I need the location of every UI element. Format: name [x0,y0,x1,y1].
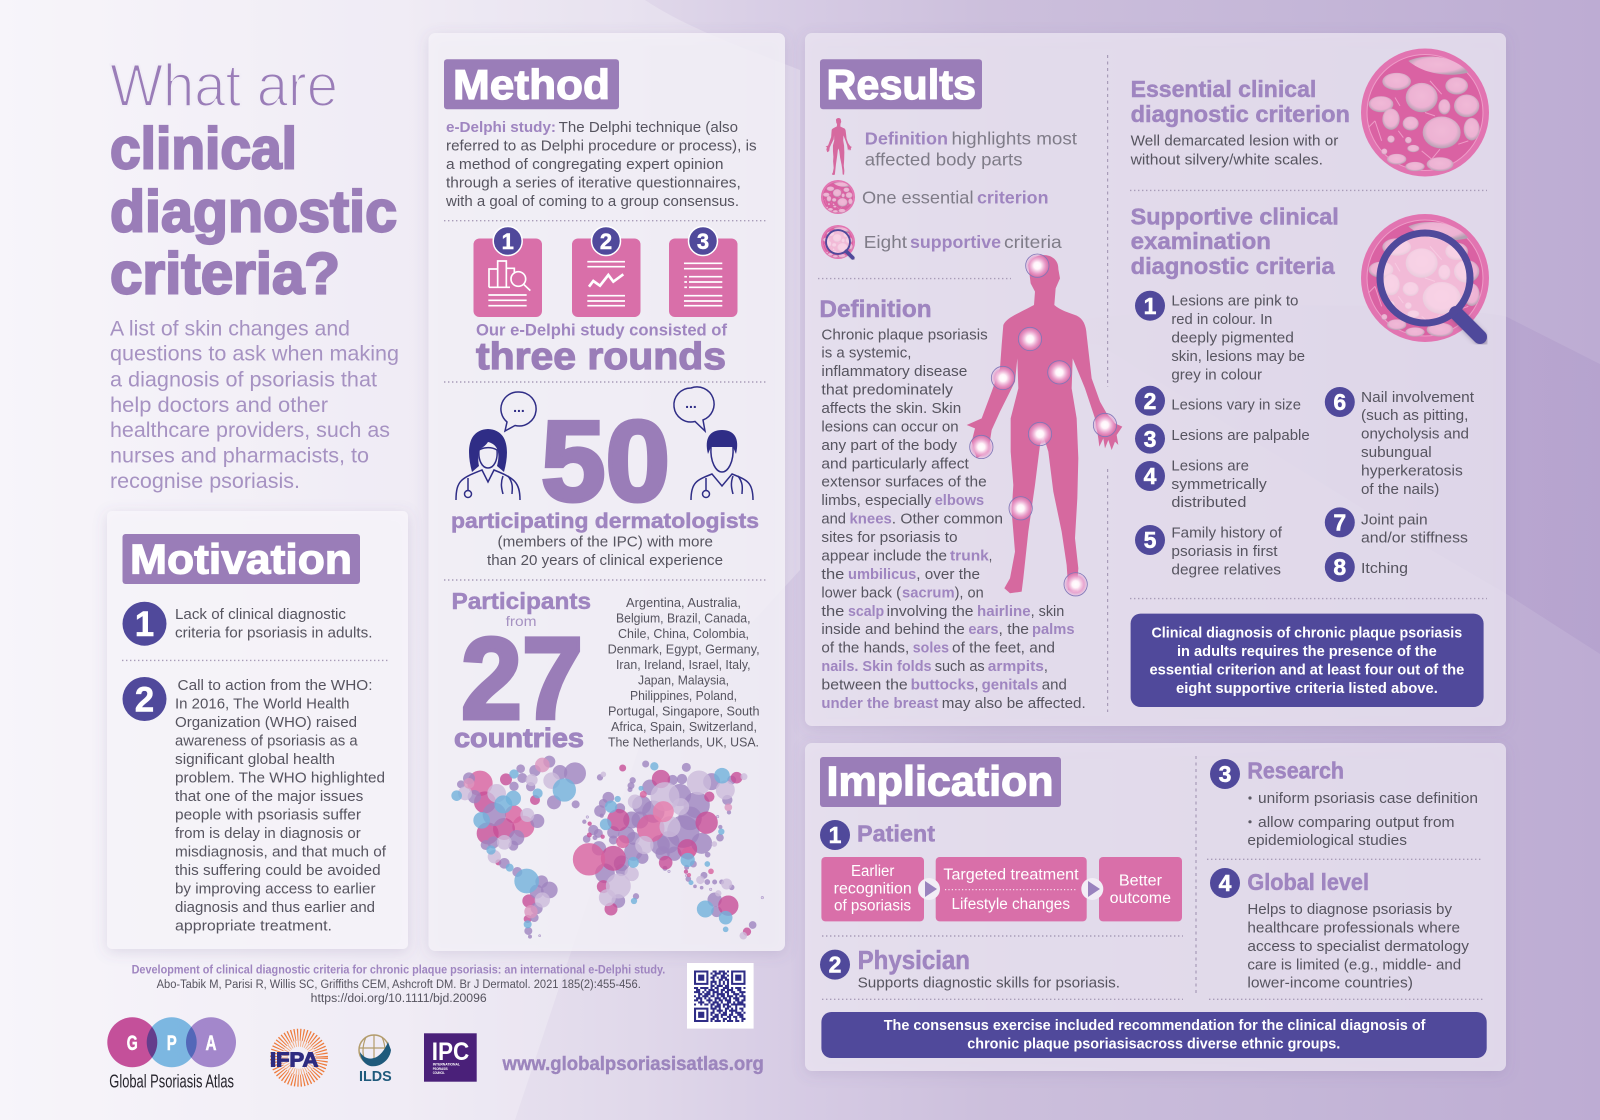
criterion 6: 6 [1333,389,1346,415]
research: allow comparing output from [1258,814,1455,831]
callout: consensus: chronic plaque psoriasisacross diverse ethnic groups. [967,1036,1340,1052]
global level: care is limited (e.g., middle- and [1247,956,1461,973]
summary: definition: Definition [865,129,948,149]
country list [608,596,760,749]
criterion 2 [1135,386,1301,416]
summary: supportive [821,225,1062,259]
citation: Development of clinical diagnostic criteria for chronic plaque psoriasis: an international e-Delphi study. [132,965,665,977]
box: earlier recognition: Earlier [851,863,894,880]
e-Delphi text: The Delphi technique (also [559,119,738,136]
box: better outcome: outcome [1110,890,1171,907]
supportive criteria heading: diagnostic criteria [1131,253,1336,279]
e-Delphi text: with a goal of coming to a group consensus. [445,193,739,210]
definition text: trunk [950,548,989,564]
box: earlier recognition [821,857,924,921]
panel: motivation [107,511,408,949]
definition text: involving the [887,603,974,620]
criterion 1: red in colour. In [1171,311,1272,328]
motivation item 2: 2 [135,680,154,720]
country list: Philippines, Poland, [630,689,737,703]
subtitle text: A list of skin changes and [110,318,350,341]
definition text: such as [935,658,985,675]
country list: Iran, Ireland, Israel, Italy, [616,658,750,672]
definition text: the [821,603,844,620]
icon: female doctor [456,392,536,500]
definition text: and particularly affect [821,455,970,472]
physician: Physician [858,947,970,975]
global level: healthcare professionals where [1247,920,1460,936]
criterion 6: onycholysis and [1361,426,1469,443]
definition text: . Other common [892,511,1003,528]
motivation item 2: misdiagnosis, and that much of [175,844,387,860]
essential criterion: without silvery/white scales. [1130,151,1323,168]
logo: ILDS: ILDS [359,1068,392,1085]
participating dermatologists text: participating dermatologists [451,510,759,533]
logo: Global Psoriasis Atlas: A [206,1032,216,1055]
definition text: armpits [988,658,1044,675]
definition text: extensor surfaces of the [821,474,987,491]
definition text: buttocks [911,676,974,694]
motivation item 2: by improving access to earlier [175,880,376,898]
motivation item 2: people with psoriasis suffer [175,806,361,824]
summary: definition [826,118,1077,175]
criterion 6: of the nails) [1361,481,1439,498]
callout: diagnosis requirement: eight supportive criteria listed above. [1176,680,1438,697]
essential criterion: diagnostic criterion [1131,101,1350,127]
criterion 2: 2 [1144,388,1156,414]
criterion 5 [1135,524,1283,578]
global level [1210,868,1469,992]
round card 3: 3 [697,229,709,254]
summary: essential: One essential [862,188,974,208]
definition text: the [821,566,844,583]
participants count: from [506,613,537,629]
box: treatment: Lifestyle changes [952,896,1070,913]
logo: IFPA: IFPA [270,1050,318,1072]
motivation item 2: problem. The WHO highlighted [175,770,385,786]
country list: Argentina, Australia, [626,596,741,610]
panel: implication [805,743,1506,1071]
box: treatment [936,857,1087,921]
definition text: genitals [982,676,1038,694]
three rounds text: Our e-Delphi study consisted of [476,322,727,340]
number 50: 50 [541,398,670,526]
country list: Belgium, Brazil, Canada, [616,612,750,626]
criterion 7: and/or stiffness [1361,530,1468,547]
criterion 6 [1325,387,1475,498]
criterion 1: Lesions are pink to [1171,292,1298,309]
criterion 8 [1325,552,1408,582]
criterion 4 [1135,457,1267,511]
motivation item 2 [122,677,387,934]
criterion 5: psoriasis in first [1171,543,1278,560]
criterion 1: skin, lesions may be [1171,348,1305,365]
summary: definition: affected body parts [865,149,1023,169]
round card 3 [669,226,738,317]
research: uniform psoriasis case definition [1258,790,1478,807]
definition text: Definition [819,296,932,323]
research: Research [1247,758,1344,784]
definition text: hairline [977,603,1031,620]
motivation item 2: awareness of psoriasis as a [175,732,358,750]
motivation item 1: 1 [135,605,154,644]
motivation item 2: diagnosis and thus earlier and [175,899,375,916]
definition text: between the [821,676,908,694]
criterion 1: grey in colour [1171,366,1262,383]
callout: diagnosis requirement: in adults requires the presence of the [1177,643,1437,660]
round card 1 [474,226,542,317]
e-Delphi text: a method of congregating expert opinion [446,156,724,173]
subtitle text [110,318,399,493]
physician [820,947,1120,992]
title [110,52,397,307]
definition text: ), on [955,584,984,601]
definition text: nails. Skin folds [821,658,932,675]
country list: Portugal, Singapore, South [608,704,760,718]
criterion 7: 7 [1333,510,1346,536]
criterion 4: distributed [1171,494,1246,511]
definition text: lower back ( [821,584,901,601]
e-Delphi text: referred to as Delphi procedure or process), is [446,138,757,155]
definition text: Chronic plaque psoriasis [821,326,988,343]
essential criterion: Well demarcated lesion with or [1131,133,1338,150]
global level: lower-income countries) [1247,975,1413,992]
logo: IPC: INTERNATIONAL [433,1062,460,1067]
three rounds text [476,322,727,378]
patient heading: 1 [829,822,842,848]
icon: magnifier over lesion [1361,214,1489,342]
motivation item 1: criteria for psoriasis in adults. [175,624,372,642]
criterion 5: Family history of [1171,524,1283,542]
definition text: limbs, especially [821,492,932,509]
website link: www.globalpsoriasisatlas.org [502,1053,764,1075]
global level: Helps to diagnose psoriasis by [1247,901,1452,918]
criterion 6: (such as pitting, [1361,407,1468,424]
definition text: sites for psoriasis to [821,529,958,546]
subtitle text: nurses and pharmacists, to [110,444,369,468]
definition text: inflammatory disease [821,363,967,380]
criterion 1: 1 [1144,293,1157,319]
supportive criteria heading: examination [1131,228,1271,254]
round card 2: 2 [600,229,612,254]
arrow 2 [1081,878,1103,900]
criterion 6: Nail involvement [1361,389,1475,406]
definition text: , [1044,658,1048,675]
motivation item 1 [122,602,372,646]
criterion 7: Joint pain [1361,511,1428,528]
country list: The Netherlands, UK, USA. [608,735,759,749]
heading: results: Results [826,61,976,108]
country list: Japan, Malaysia, [638,673,729,687]
country list: Africa, Spain, Switzerland, [611,720,757,734]
definition text: and [1042,676,1067,694]
logo: IPC: IPC [432,1038,469,1066]
participants count: Participants [452,588,591,614]
summary: essential: criterion [977,188,1048,208]
definition text: soles [913,640,949,657]
criterion 2: Lesions vary in size [1171,397,1301,414]
three rounds text: three rounds [476,336,726,378]
criterion 4: symmetrically [1171,476,1267,493]
motivation item 2: Organization (WHO) raised [175,714,357,731]
definition text: elbows [935,492,984,509]
motivation item 1: Lack of clinical diagnostic [175,606,346,623]
criterion 7 [1325,507,1468,547]
motivation item 2: from is delay in diagnosis or [175,825,361,842]
global level: access to specialist dermatology [1247,938,1469,955]
title: criteria? [110,242,340,307]
criterion 4: Lesions are [1171,457,1249,474]
box: better outcome [1099,857,1182,921]
summary: supportive: Eight [864,232,907,252]
criterion 5: 5 [1144,527,1157,553]
definition text: , the [998,621,1029,638]
round card 1: 1 [502,229,514,254]
citation: https://doi.org/10.1111/bjd.20096 [311,993,487,1005]
definition text: umbilicus [848,566,916,583]
research: epidemiological studies [1247,832,1407,849]
criterion 8: Itching [1361,560,1408,577]
definition text: affects the skin. Skin [821,400,961,417]
callout: diagnosis requirement [1131,614,1484,707]
definition text: may also be affected. [942,695,1086,712]
subtitle text: a diagnosis of psoriasis that [110,368,377,391]
panel: results [805,33,1506,726]
definition text: any part of the body [821,437,958,454]
patient heading: Patient [857,820,935,846]
motivation item 2: this suffering could be avoided [175,862,381,879]
criterion 5: degree relatives [1171,561,1281,578]
patient heading [820,820,935,850]
definition text: scalp [848,603,884,620]
summary: supportive: criteria [1004,232,1062,252]
participants count: 27 [461,614,583,744]
criterion 6: subungual [1361,444,1432,461]
definition text: of the hands, [821,640,909,657]
icon: skin lesion circle [1361,48,1489,176]
physician: 2 [829,952,841,978]
citation [132,965,665,1005]
round card 2 [572,226,640,317]
definition text: , skin [1031,603,1064,620]
definition text: , [974,676,978,694]
research [1210,758,1478,849]
patient flow [821,857,1182,921]
essential criterion: Essential clinical [1131,76,1316,102]
definition text: , [989,548,992,564]
heading: motivation: Motivation [130,536,352,583]
physician: Supports diagnostic skills for psoriasis. [858,974,1120,992]
box: earlier recognition: recognition [834,880,912,898]
country list: Denmark, Egypt, Germany, [608,642,760,656]
callout: consensus: The consensus exercise included recommendation for the clinical diagnosis of [884,1017,1426,1034]
criterion 6: hyperkeratosis [1361,462,1463,480]
definition text: that predominately [821,382,954,399]
definition text: appear include the [821,548,947,564]
global level: 4 [1219,870,1232,896]
title: clinical [110,117,297,182]
definition text: lesions can occur on [821,418,959,436]
logo: ILDS [359,1035,392,1085]
definition text [819,296,1086,712]
participating dermatologists text: (members of the IPC) with more [498,533,713,550]
criterion 3 [1135,424,1310,454]
motivation item 2: Call to action from the WHO: [178,677,372,694]
definition text: is a systemic, [821,345,911,362]
logo: IPC: PSORIASIS [433,1066,448,1071]
citation: Abo-Tabik M, Parisi R, Willis SC, Griffiths CEM, Ashcroft DM. Br J Dermatol. 2021 185(2):455-456. [157,979,641,991]
logo: Global Psoriasis Atlas [107,1017,236,1091]
participating dermatologists text [451,510,759,569]
callout: diagnosis requirement: Clinical diagnosis of chronic plaque psoriasis [1152,624,1462,642]
definition text: and [821,511,846,528]
research: 3 [1219,761,1231,787]
box: better outcome: Better [1119,873,1162,890]
logo: IFPA [270,1035,322,1081]
body figure with lesions [967,254,1122,596]
logo: Global Psoriasis Atlas: Global Psoriasis Atlas [109,1071,234,1091]
criterion 8: 8 [1333,554,1346,580]
definition text: ears [968,621,998,638]
subtitle text: healthcare providers, such as [110,419,390,442]
icon: female doctor: ... [513,399,525,415]
heading: implication: Implication [826,758,1054,805]
box: treatment: Targeted treatment [943,867,1079,884]
heading: method: Method [453,61,610,108]
supportive criteria heading: Supportive clinical [1131,203,1339,229]
callout: consensus [821,1012,1487,1058]
motivation item 2: that one of the major issues [175,788,363,805]
motivation item 2: In 2016, The World Health [175,696,350,712]
callout: diagnosis requirement: essential criterion and at least four out of the [1150,662,1464,678]
subtitle text: help doctors and other [110,394,328,417]
criterion 1 [1135,291,1305,383]
participating dermatologists text: than 20 years of clinical experience [487,552,723,569]
world bubble map [452,757,763,938]
icon: male doctor [674,387,753,500]
criterion 3: 3 [1144,426,1156,452]
title: What are [110,52,338,119]
logo: IPC: COUNCIL [433,1070,445,1075]
definition text: sacrum [902,584,955,601]
essential criterion [1130,76,1350,168]
e-Delphi text: e-Delphi study: [446,119,556,136]
definition text: under the breast [821,695,938,712]
definition text: inside and behind the [821,621,965,638]
e-Delphi text: through a series of iterative questionnaires, [446,175,741,192]
panel: method [428,33,785,951]
subtitle text: questions to ask when making [110,343,399,366]
country list: Chile, China, Colombia, [618,627,749,641]
e-Delphi text [445,119,757,210]
arrow 1 [918,878,940,900]
motivation item 2: significant global health [175,751,335,768]
definition text: , over the [916,566,980,583]
criterion 4: 4 [1144,463,1157,489]
motivation item 2: appropriate treatment. [175,918,332,934]
logo: Global Psoriasis Atlas: P [167,1032,177,1055]
logo: IPC [424,1033,477,1082]
criterion 1: deeply pigmented [1171,329,1294,346]
icon: male doctor: ... [685,395,697,411]
definition text: of the feet, and [952,640,1055,657]
definition text: knees [850,511,892,528]
QR code [687,963,754,1029]
title: diagnostic [110,179,397,244]
box: earlier recognition: of psoriasis [834,898,911,915]
summary: essential [821,180,1048,214]
supportive criteria heading [1131,203,1339,279]
global level: Global level [1247,869,1369,895]
summary: definition: highlights most [952,129,1077,149]
participants count: countries [454,723,584,753]
criterion 3: Lesions are palpable [1171,427,1310,444]
summary: supportive: supportive [910,232,1001,252]
subtitle text: recognise psoriasis. [110,470,300,493]
definition text: palms [1032,621,1074,638]
logo: Global Psoriasis Atlas: G [127,1032,138,1055]
